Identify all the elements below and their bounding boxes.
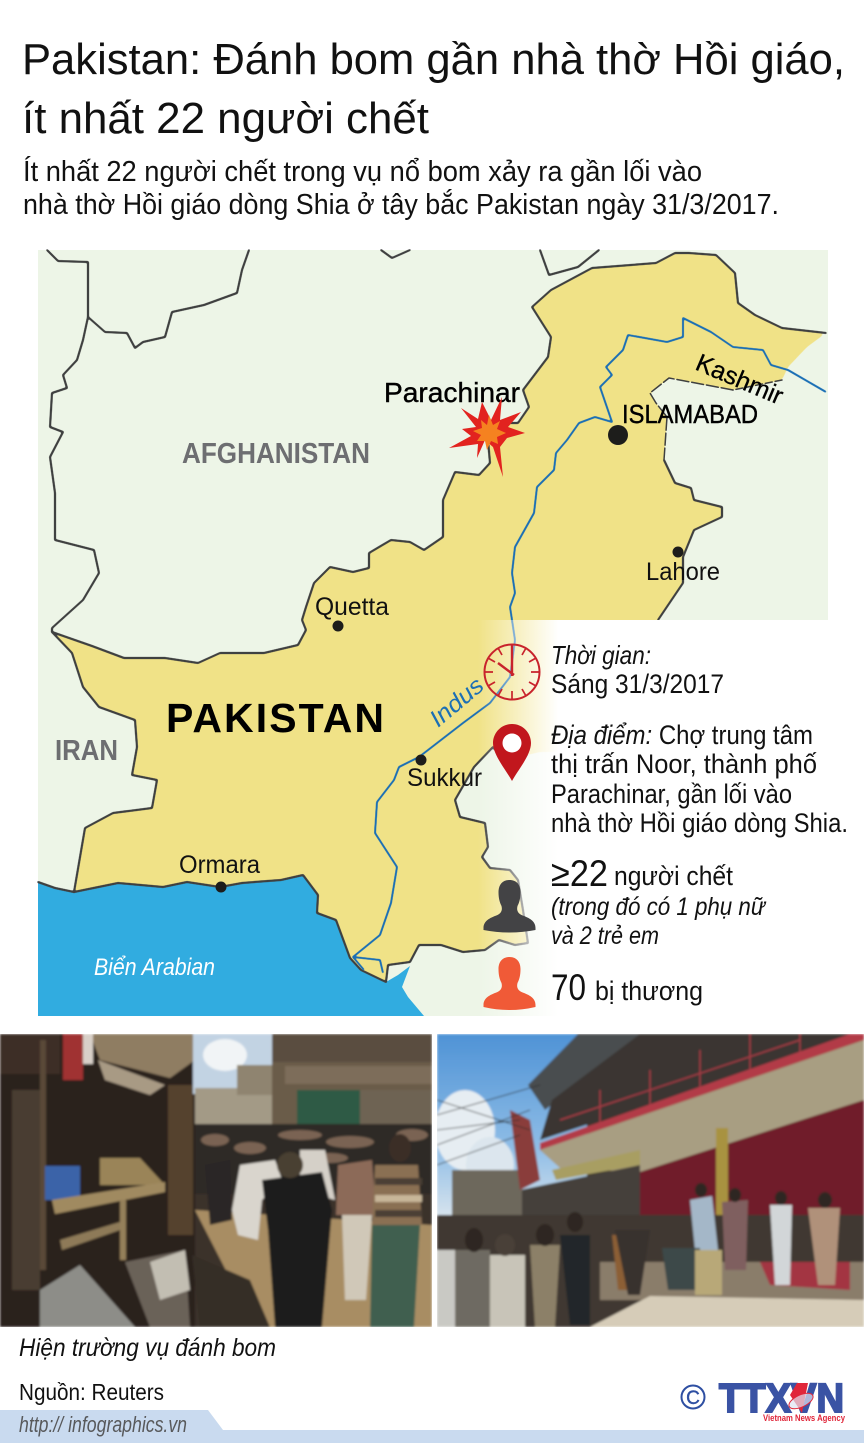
footer url: http:// infographics.vn <box>19 1412 187 1437</box>
sea <box>38 875 424 1016</box>
label: Parachinar: Parachinar <box>384 377 520 408</box>
icon: clock <box>484 644 540 700</box>
icon: person orange <box>484 957 536 1010</box>
intro text: Ít nhất 22 người chết trong vụ nổ bom xảy ra gần lối vào <box>23 155 702 188</box>
marker: Quetta <box>332 620 344 632</box>
label: Ormara: Ormara <box>179 851 260 879</box>
info block: location: Parachinar, gần lối vào <box>551 779 792 809</box>
logo: TTXVN: Vietnam News Agency <box>763 1413 846 1424</box>
info panel fade <box>478 620 864 1016</box>
river Indus <box>353 318 826 973</box>
info block: deaths: và 2 trẻ em <box>551 922 659 950</box>
logo: TTXVN <box>682 1375 846 1424</box>
map background <box>38 250 828 1016</box>
photo: bombing scene, left <box>0 1034 432 1327</box>
info block: deaths: người chết <box>614 861 733 891</box>
crowd heads <box>201 1129 428 1163</box>
label: Pakistan: PAKISTAN <box>166 695 384 741</box>
label: Iran: IRAN <box>55 735 118 767</box>
footer band <box>0 1410 864 1443</box>
label: Sukkur: Sukkur <box>407 764 482 792</box>
country borders <box>38 250 826 982</box>
info block: time: Thời gian: <box>551 640 651 670</box>
label: Arabian Sea: Biển Arabian <box>94 954 215 981</box>
info block: deaths: ≥22 <box>551 853 608 894</box>
icon: person dark <box>484 880 536 932</box>
label: Afghanistan: AFGHANISTAN <box>182 438 370 470</box>
label: Islamabad: ISLAMABAD <box>622 399 758 429</box>
map panel <box>38 250 864 1016</box>
photo caption: Hiện trường vụ đánh bom <box>19 1334 276 1362</box>
copyright mark <box>682 1386 704 1409</box>
crowd figures <box>437 1183 840 1327</box>
info block: location: Địa điểm: Chợ trung tâm <box>551 720 813 750</box>
icon: map pin <box>493 724 531 781</box>
info block: time <box>484 640 724 700</box>
info block: deaths: (trong đó có 1 phụ nữ <box>551 893 767 921</box>
info block: location <box>493 720 848 838</box>
intro text <box>23 155 779 221</box>
info block: location: thị trấn Noor, thành phố <box>551 749 817 779</box>
marker: Sukkur <box>416 754 426 766</box>
logo: TTXVN: TTXVN <box>719 1375 844 1421</box>
copyright mark: C <box>686 1388 700 1409</box>
photo: bombing scene, right <box>435 1034 864 1327</box>
Pakistan landmass <box>52 253 826 982</box>
label: Indus: Indus <box>425 672 489 733</box>
marker: Ormara <box>216 882 226 892</box>
label: Lahore: Lahore <box>646 558 720 586</box>
info block: injured: bị thương <box>595 976 703 1006</box>
title <box>22 35 845 143</box>
marker: Islamabad <box>608 425 628 445</box>
icon: explosion <box>449 397 525 477</box>
label: Quetta: Quetta <box>315 593 389 621</box>
label: Kashmir: Kashmir <box>692 349 787 410</box>
info block: time: Sáng 31/3/2017 <box>551 669 724 699</box>
title: ít nhất 22 người chết <box>22 94 429 143</box>
marker: Lahore <box>672 546 684 558</box>
info block: injured <box>484 957 703 1010</box>
info block: injured: 70 <box>551 967 586 1008</box>
intro text: nhà thờ Hồi giáo dòng Shia ở tây bắc Pakistan ngày 31/3/2017. <box>23 188 779 221</box>
title: Pakistan: Đánh bom gần nhà thờ Hồi giáo, <box>22 35 845 84</box>
info block: deaths <box>484 853 767 950</box>
source: Nguồn: Reuters <box>19 1379 164 1405</box>
